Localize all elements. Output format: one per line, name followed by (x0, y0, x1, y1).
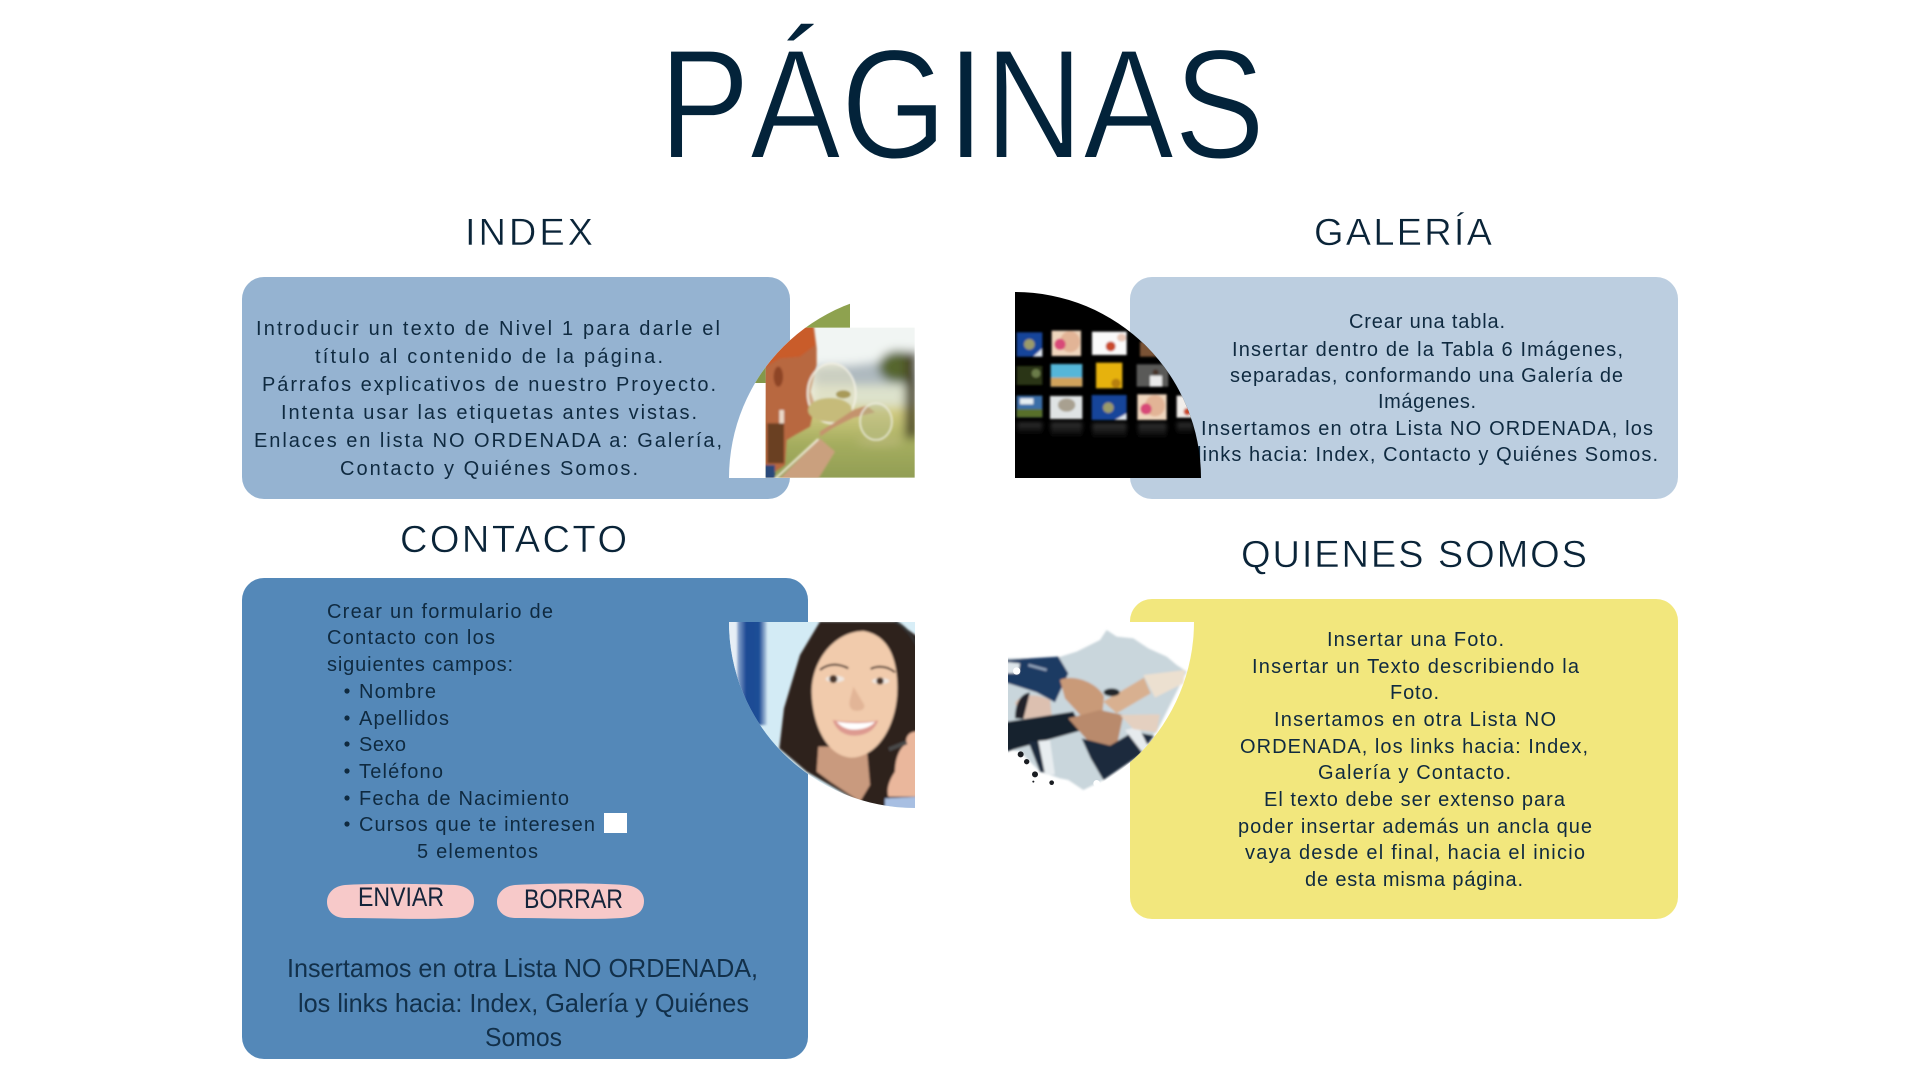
text block: galería: separadas, conformando una Galería de (1230, 365, 1623, 387)
image: woman drinking wine (729, 304, 915, 478)
thumbnail row 2 (1017, 363, 1168, 388)
text block: quienes somos: Galería y Contacto. (1318, 762, 1511, 784)
text block: form intro: siguientes campos: (327, 654, 513, 676)
text block: index: Párrafos explicativos de nuestro Proyecto. (262, 374, 716, 396)
text block: index (254, 318, 722, 480)
panel: quienes somos (1130, 599, 1678, 919)
list: form fields: Apellidos (359, 708, 449, 730)
image: team hands together (1008, 622, 1194, 790)
button: borrar (497, 884, 644, 919)
text block: form intro: Crear un formulario de (327, 601, 553, 623)
heading: quienes somos: QUIENES SOMOS (1241, 534, 1587, 576)
ink splatter (1018, 751, 1054, 785)
text block: quienes somos: Foto. (1390, 682, 1439, 704)
list: form fields: Cursos que te interesen (359, 814, 595, 836)
heading: index: INDEX (465, 212, 593, 254)
text block: links: Somos (485, 1022, 562, 1052)
text block: quienes somos: vaya desde el final, hacia el inicio (1245, 842, 1585, 864)
text block: index: título al contenido de la página. (315, 346, 663, 368)
title: PÁGINAS (659, 18, 1265, 192)
list: form fields: 5 elementos (417, 841, 538, 863)
reflection (1017, 422, 1193, 438)
panel: contacto (242, 578, 808, 1059)
text block: quienes somos: El texto debe ser extenso para (1264, 789, 1566, 811)
text block: index: Introducir un texto de Nivel 1 para darle el (256, 318, 720, 340)
text block: galería: Insertar dentro de la Tabla 6 Imágenes, (1232, 339, 1623, 361)
heading: galería: GALERÍA (1314, 211, 1493, 254)
list: form fields: Sexo (359, 734, 406, 756)
text block: quienes somos: Insertar un Texto describiendo la (1252, 656, 1580, 678)
button: borrar: BORRAR (524, 884, 623, 914)
text block: form intro (327, 601, 553, 676)
text block: form intro: Contacto con los (327, 627, 495, 649)
panel: index (242, 277, 790, 499)
text block: galería (1197, 311, 1658, 466)
text block: quienes somos: de esta misma página. (1305, 869, 1523, 891)
button: enviar: ENVIAR (358, 882, 444, 912)
text block: galería: Imágenes. (1378, 391, 1476, 413)
list: form fields: Teléfono (359, 761, 443, 783)
text block: quienes somos (1238, 629, 1592, 891)
text block: quienes somos: poder insertar además un ancla que (1238, 816, 1592, 838)
text block: index: Contacto y Quiénes Somos. (340, 458, 638, 480)
heading: contacto: CONTACTO (400, 519, 627, 561)
text block: quienes somos: Insertar una Foto. (1327, 629, 1504, 651)
white checkbox (604, 813, 627, 833)
list: form fields: Fecha de Nacimiento (359, 788, 569, 810)
text block: index: Intenta usar las etiquetas antes vistas. (281, 402, 697, 424)
text block: links (287, 953, 758, 1052)
list: form fields (344, 681, 595, 863)
text block: quienes somos: ORDENADA, los links hacia: Index, (1240, 736, 1588, 758)
text block: galería: Crear una tabla. (1349, 311, 1505, 333)
text block: index: Enlaces en lista NO ORDENADA a: Galería, (254, 430, 722, 452)
text block: galería: links hacia: Index, Contacto y Quiénes Somos. (1197, 444, 1658, 466)
text block: quienes somos: Insertamos en otra Lista NO (1274, 709, 1556, 731)
text block: galería: Insertamos en otra Lista NO ORDENADA, los (1201, 418, 1653, 440)
list: form fields: Nombre (359, 681, 436, 703)
thumbnail row 3 (1017, 394, 1193, 420)
image: woman with headset (727, 618, 920, 810)
text block: links: los links hacia: Index, Galería y Quiénes (298, 988, 749, 1018)
panel: galería (1130, 277, 1678, 499)
image: photo gallery wall (1015, 292, 1201, 478)
text block: links: Insertamos en otra Lista NO ORDENADA, (287, 953, 758, 983)
button: enviar (327, 882, 474, 919)
thumbnail row 1 (1017, 331, 1160, 357)
